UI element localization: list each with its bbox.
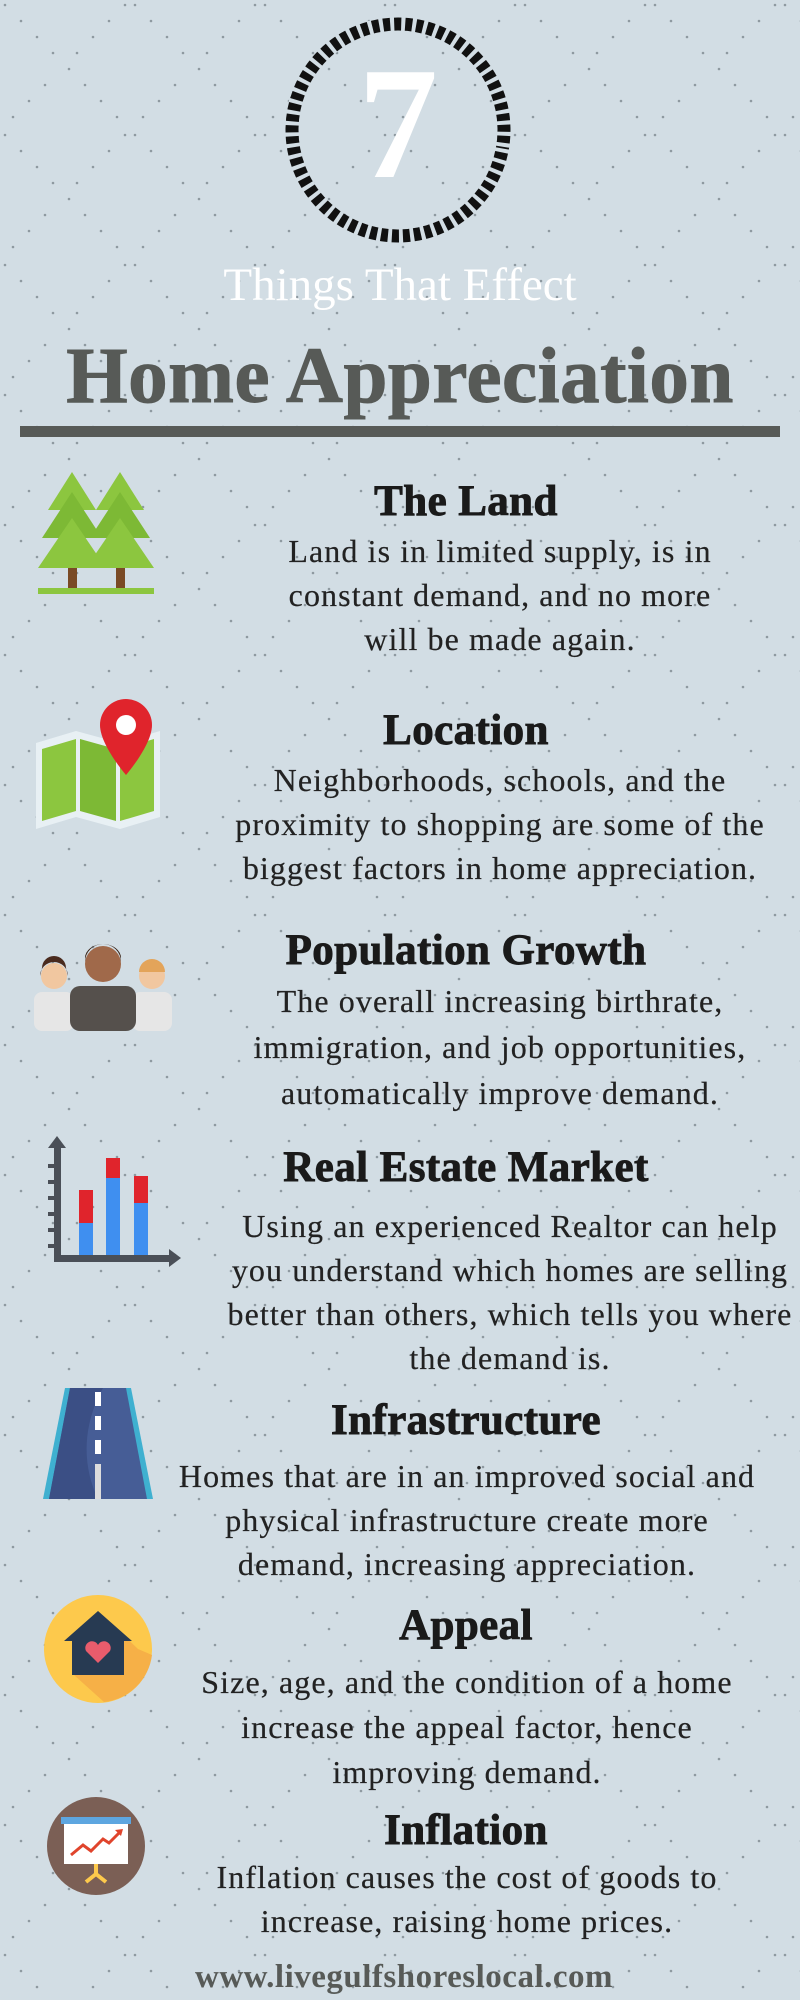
text: location	[235, 762, 765, 886]
text: appeal	[201, 1664, 733, 1790]
text: population: automatically improve demand.	[281, 1075, 719, 1111]
text: land: constant demand, and no more	[289, 577, 711, 613]
heading: Population Growth: Population Growth	[286, 927, 646, 974]
text: real estate: you understand which homes are selling	[232, 1252, 788, 1288]
icon: appeal house	[44, 1595, 152, 1703]
main title: Home Appreciation	[66, 333, 734, 420]
icon: trees	[38, 472, 154, 594]
icon: map	[36, 699, 160, 829]
text: real estate	[227, 1208, 792, 1376]
text: land: will be made again.	[364, 621, 636, 657]
footer url: www.livegulfshoreslocal.com	[195, 1959, 613, 1995]
text: land	[288, 533, 712, 658]
text: real estate: the demand is.	[409, 1340, 611, 1376]
heading: Infrastructure: Infrastructure	[331, 1397, 601, 1444]
rope ring with 7: 7	[358, 34, 438, 212]
icon: road	[43, 1388, 153, 1499]
text: inflation	[216, 1859, 718, 1940]
text: appeal: Size, age, and the condition of a home	[201, 1664, 733, 1700]
rope ring with 7	[286, 18, 510, 242]
heading: The Land: The Land	[374, 478, 558, 525]
text: inflation: increase, raising home prices.	[261, 1903, 673, 1939]
text: location: proximity to shopping are some of the	[235, 806, 765, 842]
text: real estate: Using an experienced Realtor can help	[242, 1208, 778, 1244]
text: population: The overall increasing birthrate,	[277, 983, 723, 1019]
icon: people	[34, 944, 172, 1031]
text: land: Land is in limited supply, is in	[288, 533, 712, 569]
text: inflation: Inflation causes the cost of goods to	[216, 1859, 718, 1895]
subtitle: Things That Effect	[223, 259, 577, 311]
text: infrastructure: demand, increasing appreciation.	[238, 1546, 696, 1582]
text: population: immigration, and job opportunities,	[254, 1029, 746, 1065]
heading: Inflation: Inflation	[384, 1807, 548, 1854]
text: infrastructure: physical infrastructure create more	[225, 1502, 709, 1538]
text: population	[254, 983, 746, 1112]
icon: inflation board	[47, 1797, 145, 1895]
heading: Location: Location	[383, 707, 549, 754]
text: infrastructure	[179, 1458, 755, 1582]
icon: bar chart	[48, 1136, 181, 1267]
text: appeal: improving demand.	[332, 1754, 602, 1790]
heading: Appeal: Appeal	[399, 1602, 533, 1649]
text: location: Neighborhoods, schools, and the	[274, 762, 726, 798]
text: appeal: increase the appeal factor, hence	[241, 1709, 693, 1745]
text: real estate: better than others, which tells you where	[228, 1296, 792, 1332]
heading: Real Estate Market: Real Estate Market	[283, 1144, 649, 1191]
text: location: biggest factors in home appreciation.	[243, 850, 757, 886]
title underline bar	[20, 426, 780, 437]
text: infrastructure: Homes that are in an improved social and	[179, 1458, 755, 1494]
